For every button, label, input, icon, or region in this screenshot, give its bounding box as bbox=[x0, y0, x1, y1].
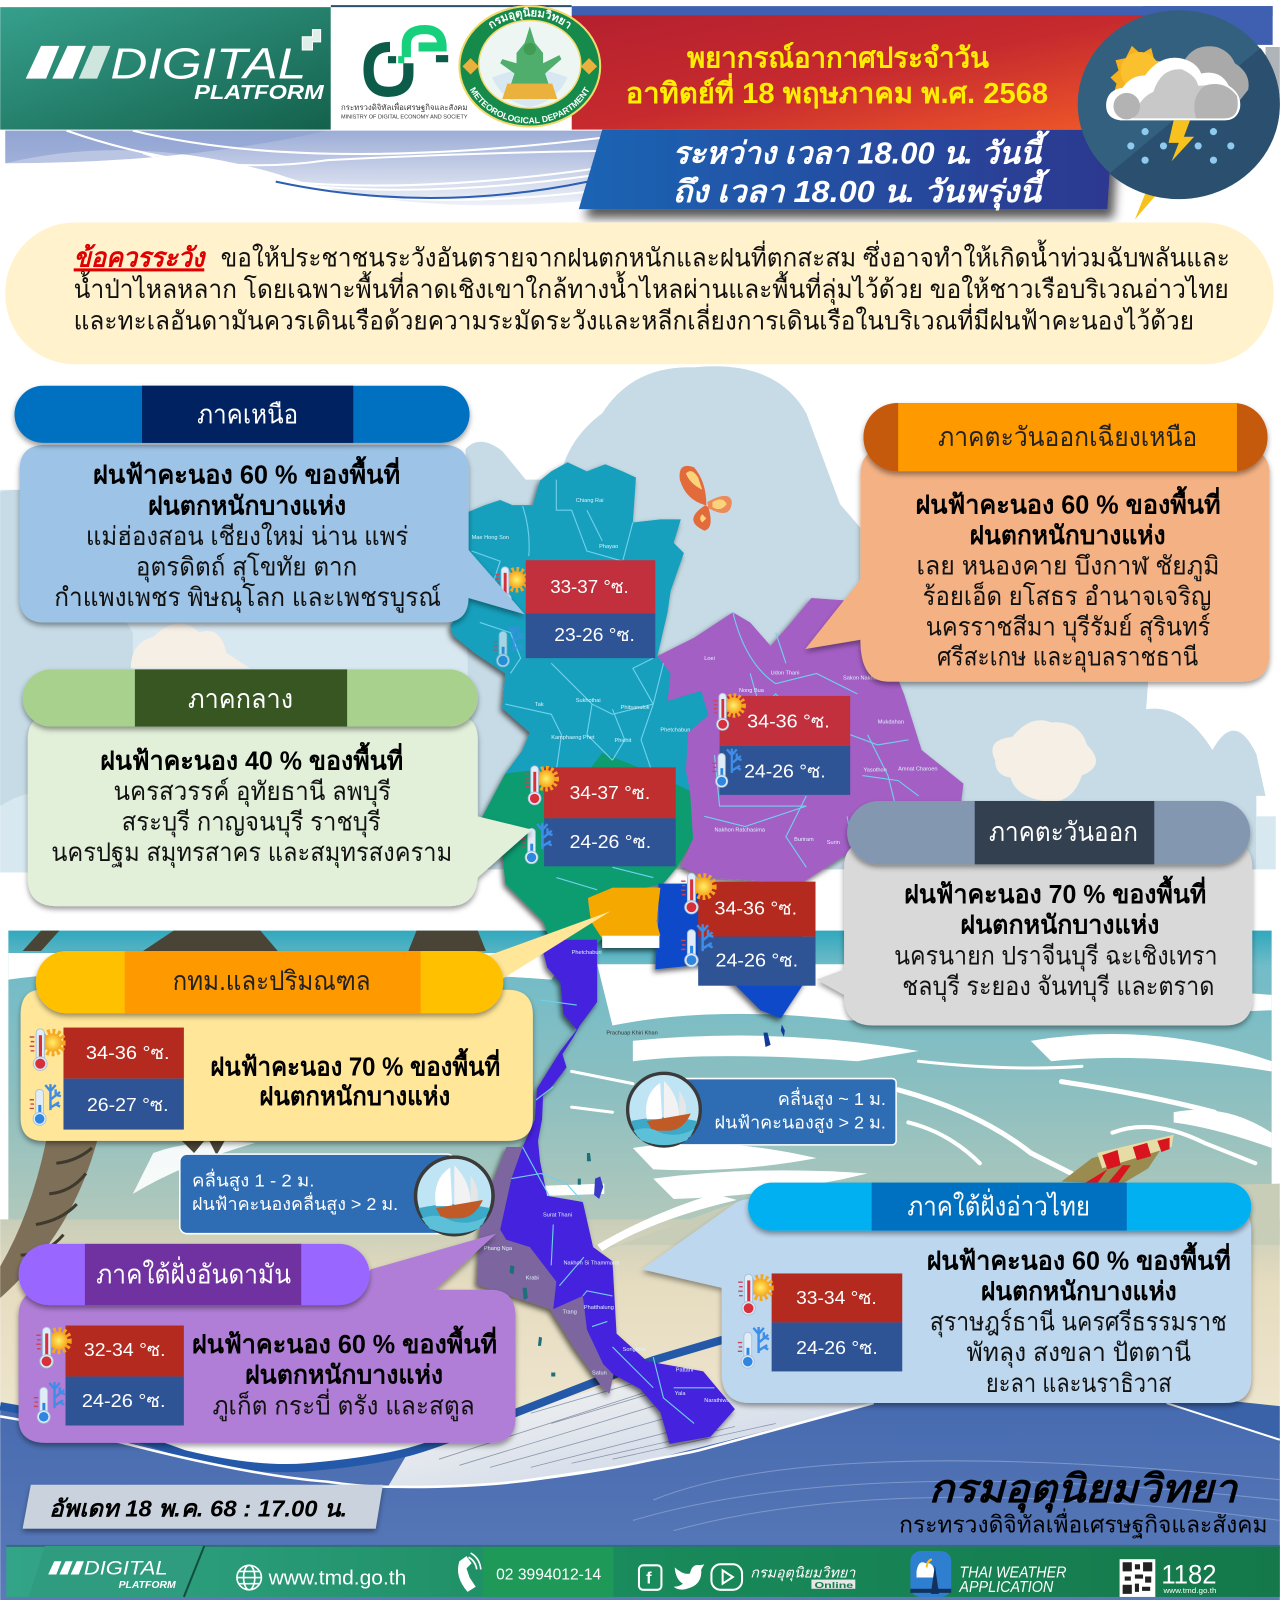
central header: ภาคกลาง bbox=[188, 684, 293, 714]
north text: ฝนฟ้าคะนอง 60 % ของพื้นที่ bbox=[93, 456, 400, 490]
panel: east bbox=[817, 801, 1252, 1026]
text: time range bbox=[673, 130, 1050, 211]
boat bbox=[1061, 1135, 1174, 1184]
map place names: Prachuap Khiri Khan bbox=[606, 1031, 658, 1037]
central text: สระบุรี กาญจนบุรี ราชบุรี bbox=[122, 809, 381, 838]
north text: อุตรดิตถ์ สุโขทัย ตาก bbox=[136, 553, 357, 583]
east header: ภาคตะวันออก bbox=[989, 817, 1138, 847]
warning text bbox=[74, 239, 1230, 336]
icon: weather app bbox=[910, 1551, 951, 1597]
north text: แม่ฮ่องสอน เชียงใหม่ น่าน แพร่ bbox=[86, 522, 408, 551]
icon: butterfly bbox=[680, 466, 732, 531]
northeast text: นครราชสีมา บุรีรัมย์ สุรินทร์ bbox=[926, 613, 1210, 643]
top blue strip bbox=[572, 6, 1273, 45]
north text: ฝนตกหนักบางแห่ง bbox=[148, 492, 346, 520]
map place names: Surat Thani bbox=[543, 1212, 572, 1218]
temperature: central: 24-26 °ซ. bbox=[570, 831, 651, 852]
warning text: ขอให้ประชาชนระวังอันตรายจากฝนตกหนักและฝนที่ตกสะสม ซึ่งอาจทำให้เกิดน้ำท่วมฉับพลันและ bbox=[221, 239, 1230, 272]
andaman temperature: 24-26 °ซ. bbox=[82, 1390, 166, 1411]
east card bbox=[817, 842, 1252, 1026]
andaman text bbox=[192, 1325, 497, 1421]
clouds bbox=[131, 623, 1096, 802]
gulf text: สุราษฎร์ธานี นครศรีธรรมราช bbox=[930, 1308, 1227, 1338]
east text: ฝนฟ้าคะนอง 70 % ของพื้นที่ bbox=[904, 875, 1206, 909]
andaman text: ภูเก็ต กระบี่ ตรัง และสตูล bbox=[212, 1388, 475, 1421]
icon: phone bbox=[458, 1553, 481, 1592]
map place names: Mae Hong Son bbox=[472, 535, 509, 541]
map place names: Narathiwat bbox=[704, 1398, 732, 1404]
temperature: east: 34-36 °ซ. bbox=[714, 897, 797, 918]
map boundaries bbox=[472, 480, 919, 1423]
bangkok header: กทม.และปริมณฑล bbox=[173, 966, 371, 996]
bangkok temperature: 34-36 °ซ. bbox=[86, 1042, 170, 1063]
central header bbox=[23, 669, 478, 727]
top wave lines bbox=[5, 131, 612, 205]
northeast text: ศรีสะเกษ และอุบลราชธานี bbox=[937, 643, 1198, 672]
north header: ภาคเหนือ bbox=[197, 399, 298, 429]
north header bbox=[14, 386, 470, 443]
gulf temperature bbox=[738, 1273, 902, 1371]
map place names: Udon Thani bbox=[771, 670, 800, 676]
gulf text bbox=[927, 1241, 1231, 1398]
department name bbox=[899, 1468, 1268, 1539]
map place names: Yala bbox=[675, 1391, 686, 1397]
central card bbox=[28, 714, 532, 906]
temperature: north bbox=[493, 560, 655, 667]
social name bbox=[750, 1566, 856, 1590]
callout: waves gulf bbox=[628, 1073, 896, 1146]
region: gulf south bbox=[500, 940, 735, 1444]
map place names: Nakhon Ratchasima bbox=[714, 828, 766, 834]
panel: digital platform logo bbox=[0, 7, 331, 130]
panel: bangkok bbox=[21, 911, 610, 1141]
icon: twitter bbox=[674, 1564, 704, 1590]
map place names bbox=[472, 498, 947, 1404]
central text: ฝนฟ้าคะนอง 40 % ของพื้นที่ bbox=[100, 741, 403, 775]
map place names: Phetchaburi bbox=[572, 950, 602, 956]
andaman card bbox=[19, 1234, 516, 1443]
gulf temperature: 33-34 °ซ. bbox=[796, 1287, 877, 1308]
northeast card bbox=[805, 449, 1270, 682]
website: www.tmd.go.th bbox=[268, 1568, 406, 1590]
east text: นครนายก ปราจีนบุรี ฉะเชิงเทรา bbox=[894, 942, 1218, 971]
warning label: ข้อควรระวัง bbox=[74, 242, 206, 272]
phone block bbox=[483, 1547, 613, 1597]
panel: north bbox=[14, 386, 525, 622]
north text bbox=[54, 456, 441, 613]
update time box bbox=[23, 1485, 383, 1529]
map place names: Krabi bbox=[526, 1276, 539, 1282]
map place names: Phetchabun bbox=[660, 728, 690, 734]
icon: meteorological department seal: METEOROLOGICAL DEPARTMENT bbox=[470, 86, 589, 124]
map place names: Buriram bbox=[794, 837, 814, 843]
warning text: และทะเลอันดามันควรเดินเรือด้วยความระมัดระวังและหลีกเลี่ยงการเดินเรือในบริเวณที่มีฝนฟ้าคะนองไว้ด้วย bbox=[74, 304, 1194, 336]
panel: warning bbox=[5, 222, 1274, 364]
footer logo bbox=[29, 1546, 204, 1597]
bottom blue swoosh bbox=[0, 1340, 1280, 1600]
map place names: Nong Bua bbox=[739, 688, 765, 694]
andaman text: ฝนฟ้าคะนอง 60 % ของพื้นที่ bbox=[192, 1325, 497, 1359]
map place names: Surin bbox=[827, 840, 840, 846]
gulf text: ฝนฟ้าคะนอง 60 % ของพื้นที่ bbox=[927, 1241, 1231, 1275]
temperature: northeast bbox=[712, 693, 850, 795]
gulf header: ภาคใต้ฝั่งอ่าวไทย bbox=[907, 1188, 1090, 1221]
icon: QR code bbox=[1120, 1559, 1155, 1597]
bangkok header bbox=[36, 951, 503, 1013]
map place names: Sakon Nakhon bbox=[843, 676, 880, 682]
temperature: north: 23-26 °ซ. bbox=[554, 624, 635, 645]
temperature: east: 24-26 °ซ. bbox=[716, 949, 798, 970]
bangkok temperature: 26-27 °ซ. bbox=[87, 1094, 169, 1115]
andaman temperature: 32-34 °ซ. bbox=[84, 1339, 166, 1360]
northeast text: ร้อยเอ็ด ยโสธร อำนาจเจริญ bbox=[923, 581, 1211, 611]
map place names: Phatthalung bbox=[584, 1305, 614, 1311]
warning text: น้ำป่าไหลหลาก โดยเฉพาะพื้นที่ลาดเชิงเขาใกล้ทางน้ำไหลผ่านและพื้นที่ลุ่มไว้ด้วย ขอให้ชาวเรือบริเวณอ่าวไทย bbox=[74, 271, 1229, 305]
northeast text: ฝนตกหนักบางแห่ง bbox=[970, 522, 1166, 550]
map place names: Yasothon bbox=[863, 767, 887, 773]
northeast text bbox=[916, 485, 1221, 672]
map place names: Nakhon Si Thammarat bbox=[563, 1260, 620, 1266]
map place names: Amnat Charoen bbox=[898, 766, 937, 772]
bangkok temperature bbox=[30, 1028, 184, 1130]
title bbox=[626, 41, 1048, 110]
region: central bbox=[480, 753, 693, 949]
text: time range: ถึง เวลา 18.00 น. วันพรุ่งนี้ bbox=[673, 169, 1050, 211]
panel: central bbox=[23, 669, 532, 906]
department name: กระทรวงดิจิทัลเพื่อเศรษฐกิจและสังคม bbox=[899, 1508, 1268, 1539]
department name: กรมอุตุนิยมวิทยา bbox=[929, 1468, 1239, 1513]
app name bbox=[958, 1565, 1067, 1596]
region: andaman south bbox=[477, 1147, 613, 1394]
icon: storm weather bbox=[1078, 10, 1280, 219]
temperature: northeast: 34-36 °ซ. bbox=[747, 711, 830, 732]
map place names: Kamphaeng Phet bbox=[551, 735, 595, 741]
icon: meteorological department seal bbox=[458, 5, 602, 128]
east text: ชลบุรี ระยอง จันทบุรี และตราด bbox=[902, 973, 1214, 1002]
panel: ministry logo: MINISTRY OF DIGITAL ECONOMY AND SOCIETY bbox=[341, 114, 468, 120]
gulf text: พัทลุง สงขลา ปัตตานี bbox=[967, 1339, 1191, 1368]
panel: ministry logo: กระทรวงดิจิทัลเพื่อเศรษฐกิจและสังคม bbox=[341, 102, 468, 112]
panel: andaman bbox=[19, 1234, 516, 1443]
panel: digital platform logo: DIGITAL bbox=[110, 40, 306, 89]
central text: นครสวรรค์ อุทัยธานี ลพบุรี bbox=[113, 777, 391, 807]
central text bbox=[51, 741, 452, 868]
north text: กำแพงเพชร พิษณุโลก และเพชรบูรณ์ bbox=[54, 583, 441, 613]
temperature: north: 33-37 °ซ. bbox=[550, 576, 629, 597]
callout: waves andaman: ฝนฟ้าคะนองคลื่นสูง > 2 ม. bbox=[192, 1192, 398, 1215]
panel: digital platform logo: PLATFORM bbox=[194, 82, 325, 104]
map place names: Phayao bbox=[599, 544, 618, 550]
east text bbox=[894, 875, 1218, 1002]
region: east bbox=[655, 884, 806, 1018]
footer bar bbox=[6, 1545, 1280, 1597]
gulf header bbox=[748, 1183, 1251, 1231]
icon: youtube bbox=[711, 1564, 742, 1590]
bangkok text bbox=[210, 1048, 500, 1111]
andaman header: ภาคใต้ฝั่งอันดามัน bbox=[96, 1257, 291, 1290]
bangkok card bbox=[21, 990, 533, 1141]
palm tree bbox=[0, 931, 486, 1298]
panel: ministry logo bbox=[331, 5, 572, 130]
temperature: east bbox=[681, 873, 816, 986]
sky bbox=[0, 366, 1276, 872]
temperature: northeast: 24-26 °ซ. bbox=[744, 761, 826, 782]
social name: กรมอุตุนิยมวิทยา bbox=[750, 1566, 856, 1582]
callout: waves andaman bbox=[180, 1154, 493, 1235]
bangkok text: ฝนตกหนักบางแห่ง bbox=[259, 1083, 450, 1111]
icon: facebook bbox=[639, 1565, 661, 1590]
footer logo: PLATFORM bbox=[119, 1580, 176, 1591]
app name: THAI WEATHER bbox=[959, 1565, 1067, 1582]
region: bangkok bbox=[588, 888, 660, 939]
icon: globe bbox=[237, 1565, 261, 1590]
map place names: Ubon Ratchathani bbox=[902, 807, 947, 813]
region: northeast bbox=[657, 598, 963, 884]
hotline: 1182 bbox=[1161, 1560, 1217, 1590]
gulf card bbox=[642, 1199, 1251, 1403]
northeast header: ภาคตะวันออกเฉียงเหนือ bbox=[938, 422, 1197, 452]
map place names: Phitsanulok bbox=[621, 705, 650, 711]
andaman header bbox=[19, 1244, 370, 1305]
title: อาทิตย์ที่ 18 พฤษภาคม พ.ศ. 2568 bbox=[626, 73, 1048, 110]
app name: APPLICATION bbox=[958, 1579, 1054, 1596]
map place names: Mukdahan bbox=[878, 719, 904, 725]
map place names: Chiang Rai bbox=[576, 498, 603, 504]
banner: red title bbox=[572, 15, 1147, 130]
map place names: Songkhla bbox=[623, 1347, 647, 1353]
map place names: Satun bbox=[592, 1370, 607, 1376]
footer logo: DIGITAL bbox=[84, 1557, 168, 1579]
panel: northeast bbox=[805, 403, 1270, 682]
andaman temperature bbox=[34, 1326, 184, 1426]
text: time range: ระหว่าง เวลา 18.00 น. วันนี้ bbox=[673, 130, 1050, 170]
bangkok pointer bbox=[464, 911, 610, 982]
callout: waves gulf: คลื่นสูง ~ 1 ม. bbox=[778, 1087, 886, 1110]
callout: waves andaman: คลื่นสูง 1 - 2 ม. bbox=[192, 1169, 314, 1192]
andaman text: ฝนตกหนักบางแห่ง bbox=[245, 1362, 443, 1390]
map place names: Phang Nga bbox=[484, 1246, 513, 1252]
banner: blue time range bbox=[579, 130, 1112, 209]
hotline: www.tmd.go.th bbox=[1162, 1587, 1217, 1595]
gulf text: ฝนตกหนักบางแห่ง bbox=[981, 1278, 1177, 1306]
map place names: Loei bbox=[704, 656, 715, 662]
map place names: Tak bbox=[535, 702, 544, 708]
islands bbox=[509, 1024, 785, 1377]
sea bbox=[0, 931, 1280, 1439]
east text: ฝนตกหนักบางแห่ง bbox=[960, 912, 1159, 940]
callout: waves gulf: ฝนฟ้าคะนองสูง > 2 ม. bbox=[714, 1113, 886, 1134]
east header bbox=[847, 801, 1250, 864]
northeast header bbox=[863, 403, 1268, 471]
title: พยากรณ์อากาศประจำวัน bbox=[687, 41, 989, 74]
bangkok text: ฝนฟ้าคะนอง 70 % ของพื้นที่ bbox=[210, 1048, 500, 1082]
panel: gulf bbox=[642, 1183, 1251, 1403]
phone number: 02 3994012-14 bbox=[496, 1567, 602, 1584]
map place names: Sukhothai bbox=[576, 698, 601, 704]
central text: นครปฐม สมุทรสาคร และสมุทรสงคราม bbox=[51, 839, 452, 868]
gulf temperature: 24-26 °ซ. bbox=[796, 1337, 878, 1358]
map place names: Trang bbox=[562, 1309, 577, 1315]
north card bbox=[20, 445, 525, 622]
northeast text: เลย หนองคาย บึงกาฬ ชัยภูมิ bbox=[917, 552, 1220, 581]
icon: facebook: f bbox=[646, 1570, 652, 1588]
map place names: Phichit bbox=[614, 738, 632, 744]
temperature: central: 34-37 °ซ. bbox=[570, 782, 650, 803]
temperature: central bbox=[522, 766, 676, 866]
region: north bbox=[450, 462, 708, 791]
update time box: อัพเดท 18 พ.ค. 68 : 17.00 น. bbox=[49, 1495, 347, 1521]
social name: Online bbox=[814, 1581, 854, 1590]
map place names: Pattani bbox=[676, 1367, 693, 1373]
map of Thailand bbox=[450, 462, 963, 1444]
northeast text: ฝนฟ้าคะนอง 60 % ของพื้นที่ bbox=[916, 485, 1221, 519]
gulf text: ยะลา และนราธิวาส bbox=[986, 1370, 1172, 1398]
icon: meteorological department seal: กรมอุตุนิยมวิทยา bbox=[489, 7, 571, 29]
